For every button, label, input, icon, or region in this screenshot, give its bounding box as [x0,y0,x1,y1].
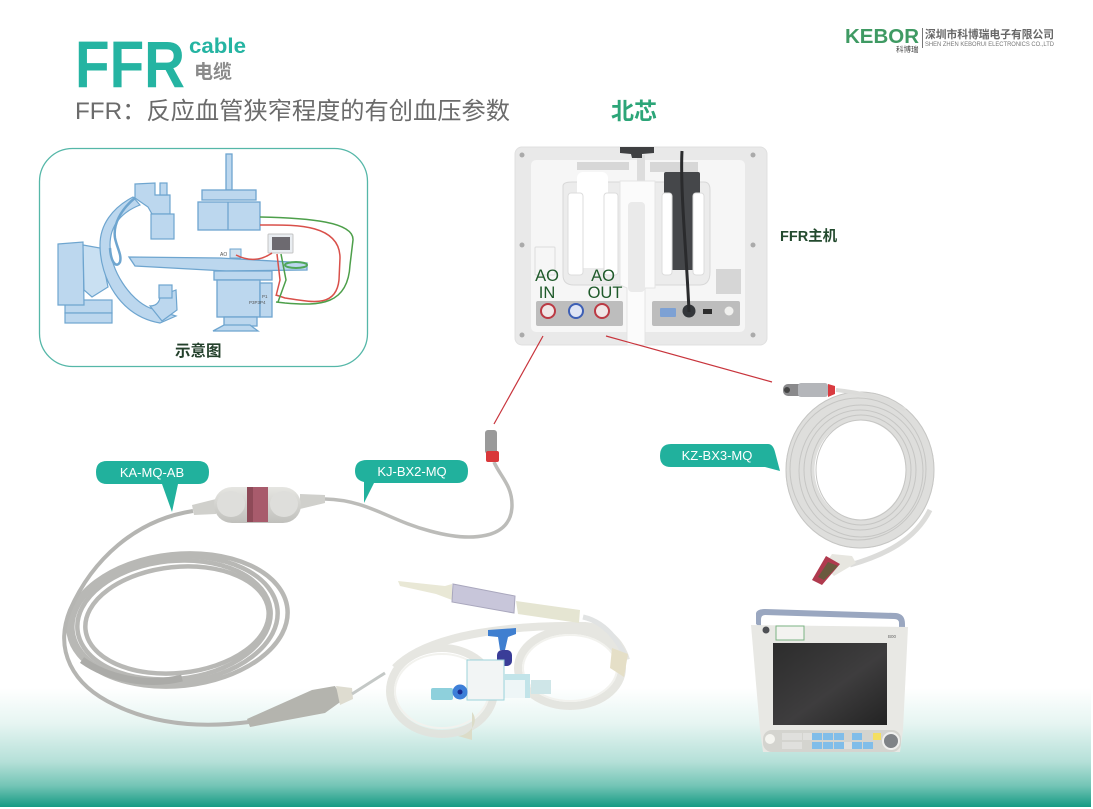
connector top [783,383,905,410]
title: 电缆 [194,61,232,83]
grey coil [62,543,294,697]
GE badge [762,626,770,634]
icon: table [129,257,307,331]
caption: 示意图 [175,341,222,360]
title: FFR [75,27,185,101]
transducer connector [247,673,385,727]
callout: KA-MQ-AB [96,461,209,512]
bottom gradient band [0,688,1091,807]
panel: schematic diagram: P1 [262,294,268,299]
AO OUT label: AO [591,267,615,285]
callout: KA-MQ-AB: KA-MQ-AB [120,465,184,480]
label: FFR host: FFR主机 [780,227,838,245]
drip chamber [398,581,580,623]
logo: SHEN ZHEN KEBORUI ELECTRONICS CO.,LTD [925,42,1055,48]
cable KJ [325,462,512,537]
transducer block [467,660,551,700]
keypad [763,730,901,752]
callout: KJ-BX2-MQ [355,460,468,503]
logo: KEBOR [845,26,920,48]
black cord [682,151,689,312]
callout: KZ-BX3-MQ: KZ-BX3-MQ [682,448,752,463]
callout: KJ-BX2-MQ: KJ-BX2-MQ [377,464,447,479]
AO OUT label: OUT [588,284,622,302]
red and green connection lines [236,217,353,304]
arrow: AO IN to connector [494,336,543,424]
icon: FFR host [268,234,293,253]
brand label: 北芯: 北芯 [611,98,657,124]
port panel left [536,301,623,326]
panel: schematic diagram: P3P3P4 [249,300,266,305]
inline module [192,487,325,523]
IV transducer set [390,581,628,740]
left holder [563,182,620,285]
screen [773,643,887,725]
main cable KA [64,511,249,725]
title: cable [189,35,246,58]
green sticker [776,626,804,640]
rating label [716,269,741,294]
port panel right [652,301,740,326]
logo: 深圳市科博瑞电子有限公司 [925,27,1054,41]
subtitle: FFR：反应血管狭窄程度的有创血压参数 [75,98,510,125]
cable assembly left [62,430,512,727]
icon: overhead display [198,154,260,230]
patient monitor [751,609,908,752]
right holder [655,182,710,285]
red ring connector [485,430,499,462]
left luer and stopcock [431,684,468,700]
tube wrap bands [610,648,628,677]
icon: C-arm X-ray machine [58,183,177,323]
logo [845,26,1055,54]
icon: AO box [220,249,241,258]
callout: KZ-BX3-MQ [660,444,780,471]
patient monitor: B00 [888,634,897,639]
icon: AO box: AO [220,252,227,258]
central stand [637,155,645,185]
logo: 科博瑞 [896,44,919,54]
handle [756,609,905,632]
arrow: AO OUT to connector [606,336,772,382]
panel: FFR host back [515,147,767,345]
AO IN label: IN [539,284,555,302]
vents [577,162,698,172]
cable assembly right: coil [783,383,934,585]
body [751,625,908,752]
AO IN label: AO [535,267,559,285]
connector bottom [812,554,856,585]
screw holes [520,152,756,338]
blue stopcock [488,628,516,666]
top knob [620,147,654,158]
loops of tubing [390,626,626,734]
panel: schematic diagram [40,148,368,366]
